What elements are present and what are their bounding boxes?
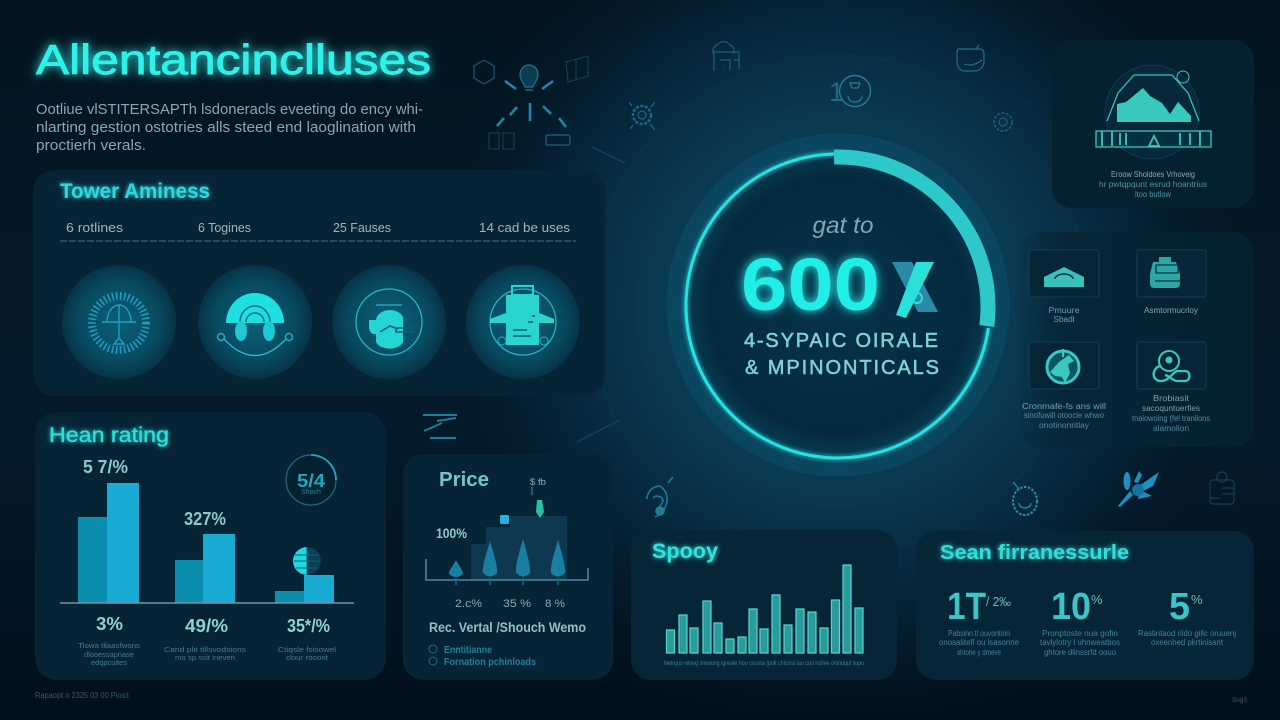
gauge: 54: Shoch — [301, 489, 321, 496]
metric: 5%: % — [1191, 592, 1203, 607]
bar value labels: 5 7/% — [83, 457, 128, 477]
panel: feature grid — [1020, 232, 1254, 447]
subtitle: & MPINONTICALS — [745, 357, 939, 379]
arrows — [497, 81, 566, 127]
stat labels: 14 cad be uses — [479, 221, 570, 235]
metric: 5%: Rastintaod rildo gillc oruuenj — [1138, 629, 1236, 638]
icon circle: printer — [466, 265, 580, 379]
panel: Price: 100% — [436, 526, 467, 541]
icon: panels — [489, 133, 514, 149]
icon: small badge — [994, 113, 1012, 131]
caption: Eroow Sholdoes Vrhoveig — [1111, 170, 1195, 179]
legend: Enntitianne — [444, 645, 492, 656]
heading: Spooy — [652, 540, 718, 563]
icon: mountain screen — [1096, 65, 1211, 159]
legend: Fornation pchinloads — [444, 657, 536, 668]
caption: ltoo butlow — [1135, 190, 1171, 199]
metric captions — [78, 641, 336, 667]
panel: Sean firranessurle — [916, 531, 1254, 680]
gauge: 54: 5/4 — [297, 471, 325, 491]
icon: faint archive — [1210, 472, 1234, 504]
stat labels: 6 Togines — [198, 221, 251, 235]
metric values: 35*/% — [287, 616, 330, 636]
intro text block: nlarting gestion ostotries alls steed end laoglination with — [36, 119, 416, 136]
bar chart — [60, 483, 354, 603]
intro text block: proctierh verals. — [36, 137, 146, 154]
metric: 5%: 5 — [1169, 586, 1190, 628]
metric: 10%: tavlylotry l uhnweatbos — [1040, 638, 1120, 647]
stylised X — [892, 262, 938, 318]
icon: light bulb — [520, 65, 538, 90]
tile: machine — [1137, 250, 1206, 315]
metric: 5% — [1138, 586, 1236, 647]
tile: envelope: Sbadl — [1054, 314, 1075, 324]
metric captions: edqpcuites — [91, 658, 127, 667]
title: Allentancinclluses — [36, 36, 431, 83]
tile: infinity gear: tnaiowolng (fel tranilons — [1132, 414, 1210, 423]
metric captions: mo sp ssit ineven — [175, 653, 235, 662]
panel: dashboard preview — [1052, 40, 1254, 208]
intro text block: Ootliue vlSTITERSAPTh lsdoneracls eveeting do ency whi- — [36, 101, 423, 118]
tile: infinity gear: sacoquntuerfies — [1142, 404, 1200, 413]
tile: globe: sinofuwill otoocle whwo — [1024, 411, 1105, 420]
metric: 1T — [939, 586, 1020, 657]
progress arc — [834, 157, 988, 326]
icon: cup — [957, 45, 984, 71]
x axis labels: 8 % — [545, 598, 565, 610]
metric: 10%: Pronptoste nua gofin — [1042, 629, 1118, 638]
tile: globe: onotinonntlay — [1039, 421, 1089, 430]
icon: building — [713, 42, 739, 71]
tile: machine: Asmtormucrloy — [1144, 305, 1199, 315]
gauge: central ring — [676, 143, 1000, 467]
caption — [1099, 170, 1207, 199]
metric: 1T: / 2‰ — [986, 594, 1011, 609]
icon cluster: idea network — [474, 56, 588, 149]
subtitle: 4-SYPAIC OIRALE — [744, 330, 938, 352]
icon circle: headphones — [198, 265, 312, 379]
panel: Hean rating — [35, 412, 386, 680]
panel: Spooy — [631, 530, 897, 680]
metric: 10%: % — [1091, 592, 1103, 607]
tile: infinity gear — [1132, 342, 1210, 433]
icon: numbered circle: 1 — [829, 77, 844, 107]
ring track — [686, 154, 988, 458]
big number: 600 — [741, 243, 880, 326]
floating icons around the gauge — [629, 42, 1234, 517]
panel: Price — [403, 454, 613, 680]
metric: 1T: 1T — [947, 586, 986, 628]
icon: blue flower — [1118, 471, 1159, 507]
gauge: 54 — [286, 455, 336, 505]
icon: globe — [293, 547, 321, 575]
column chart — [666, 565, 863, 653]
metric values: 49/% — [185, 616, 228, 636]
icon: numbered circle — [829, 76, 870, 107]
caption: hr pwtqpqunt esrud hoantrius — [1099, 180, 1207, 189]
metric: 1T: shtone y dmeve — [957, 648, 1001, 657]
tile: envelope: Pmuure — [1048, 305, 1080, 315]
heading: Price — [439, 469, 489, 491]
subheading: Rec. Vertal /Shouch Wemo — [429, 620, 586, 635]
metric: 10% — [1040, 586, 1120, 657]
bar value labels: 327% — [184, 509, 226, 529]
icon: small tool — [423, 415, 457, 438]
icon: tablet — [566, 56, 588, 82]
metric: 10%: 10 — [1051, 586, 1091, 628]
metric: 1T: Pabsinn tl ouvontoin — [948, 629, 1010, 638]
tile: globe: Cronmafe-fs ans will — [1022, 402, 1106, 411]
x axis labels — [455, 598, 565, 610]
metric captions: clour rooorit — [286, 653, 329, 662]
bar value labels — [83, 457, 226, 529]
stat labels: 6 rotlines — [66, 221, 123, 235]
tile: infinity gear: Brobiasit — [1153, 394, 1190, 403]
heading: Hean rating — [49, 423, 169, 447]
tile: infinity gear: alamolion — [1153, 424, 1189, 433]
footer page mark: Sug3 — [1232, 695, 1247, 704]
subtitle — [744, 330, 939, 379]
footer note: Rapaopt o 2325 03 00 Piosit — [35, 691, 130, 700]
tile: globe — [1022, 342, 1106, 430]
icon circle: device — [332, 265, 446, 379]
legend — [429, 645, 536, 668]
heading: Tower Aminess — [60, 179, 210, 203]
metric captions: Ctiqsle fsisowel — [278, 645, 336, 654]
icon: screen — [546, 135, 570, 145]
icon: spiral ear — [647, 477, 673, 517]
icon circle: radial burst — [62, 265, 176, 379]
heading: Sean firranessurle — [940, 541, 1129, 564]
metric values — [96, 614, 330, 636]
stat labels — [66, 221, 570, 235]
chart caption: Netrquo wlong smoiong igreate hoo cousta (polt chicora tau cou nolive ontnuqut liopo — [664, 660, 864, 667]
metric: 10%: ghtore dlinssrfd oouo — [1044, 648, 1117, 657]
panel: Price: $ fb — [530, 477, 546, 487]
chart: price steps — [426, 500, 588, 585]
intro text block — [36, 101, 423, 154]
panel: Tower Aminess — [33, 170, 605, 396]
icon: hexagon — [474, 60, 494, 84]
metric captions: dlooessapnase — [84, 650, 134, 659]
x axis labels: 35 % — [503, 598, 531, 610]
stat labels: 25 Fauses — [333, 221, 391, 235]
icon: dotted ring — [1013, 482, 1037, 515]
metric captions: Cand plit tillsvodsions — [164, 645, 246, 654]
eyebrow: gat to — [812, 212, 874, 238]
metric: 5%: oxeenhed pkrtinisant — [1151, 638, 1224, 647]
icon: gear left — [629, 102, 655, 130]
metric captions: Tlowa tilaasfwons — [78, 641, 140, 650]
x axis labels: 2.c% — [455, 598, 482, 610]
tile: envelope — [1029, 250, 1099, 324]
metric: 1T: onosalitefl ou isasonne — [939, 638, 1020, 647]
metric values: 3% — [96, 614, 123, 634]
